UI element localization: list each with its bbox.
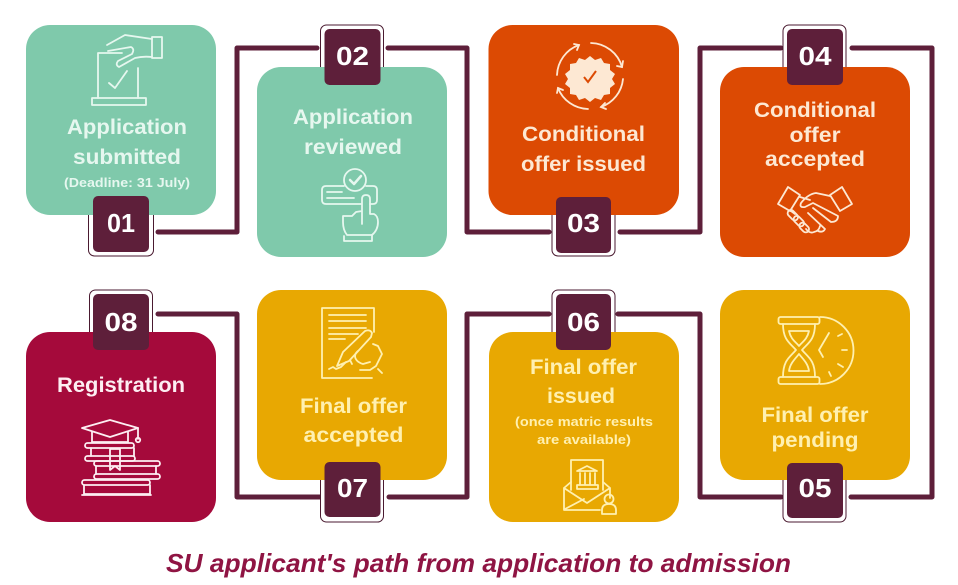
badge 02 bbox=[324, 29, 380, 85]
icon: ballot box with hand bbox=[92, 35, 162, 105]
icon: gear with check and cycle arrows bbox=[557, 43, 623, 109]
badge 08 bbox=[93, 294, 149, 350]
number 03: 03 bbox=[567, 208, 600, 238]
heading: Application bbox=[67, 116, 187, 139]
heading: Application bbox=[293, 106, 413, 129]
badge 01 bbox=[93, 196, 149, 252]
number 07: 07 bbox=[337, 473, 368, 503]
heading: Final offer bbox=[530, 356, 637, 379]
panel: step 08 registration bbox=[26, 332, 216, 522]
badge 05 bbox=[787, 463, 843, 518]
note: (once matric results bbox=[515, 415, 653, 429]
panel: step 06 final offer issued bbox=[489, 332, 679, 522]
icon: graduation cap on books bbox=[82, 420, 160, 495]
panel: step 03 conditional offer issued bbox=[488, 25, 679, 215]
heading: Conditional bbox=[754, 99, 876, 122]
note line 2: are available) bbox=[537, 433, 631, 447]
badge 07 bbox=[324, 462, 380, 517]
heading: Final offer bbox=[762, 404, 868, 427]
panel: step 01 application submitted bbox=[26, 25, 216, 215]
heading line 2: submitted bbox=[73, 146, 181, 169]
number 08: 08 bbox=[104, 307, 138, 337]
badge 03 bbox=[556, 197, 611, 253]
panel: step 05 final offer pending bbox=[720, 290, 910, 480]
icon: hand signing document bbox=[322, 308, 382, 378]
panel: step 02 application reviewed bbox=[257, 67, 447, 257]
icon: pointing hand with check bbox=[322, 169, 378, 241]
heading line 2: offer issued bbox=[521, 153, 646, 176]
number 01: 01 bbox=[107, 208, 135, 238]
heading line 2: accepted bbox=[304, 424, 404, 447]
note: (Deadline: 31 July) bbox=[64, 176, 190, 190]
heading line 2: issued bbox=[547, 385, 615, 408]
panel: step 07 final offer accepted bbox=[257, 290, 447, 480]
heading: Final offer bbox=[300, 395, 407, 418]
number 04: 04 bbox=[798, 41, 832, 71]
heading: Conditional bbox=[522, 123, 645, 146]
icon: envelope with bank and person bbox=[564, 460, 616, 514]
heading line 2: reviewed bbox=[304, 136, 402, 159]
title: SU applicant's path from application to admission bbox=[166, 548, 791, 578]
number 06: 06 bbox=[567, 307, 600, 337]
heading: Registration bbox=[57, 374, 185, 397]
number 05: 05 bbox=[798, 473, 832, 503]
connector path between steps bbox=[158, 48, 932, 497]
badge 06 bbox=[556, 294, 611, 350]
badge 04 bbox=[787, 29, 843, 85]
badge outlines bbox=[88, 25, 846, 522]
heading line 3: accepted bbox=[765, 148, 865, 171]
heading line 2: pending bbox=[772, 429, 858, 452]
heading line 2: offer bbox=[790, 124, 840, 147]
icon: handshake bbox=[778, 187, 852, 234]
number 02: 02 bbox=[336, 41, 369, 71]
panel: step 04 conditional offer accepted bbox=[720, 67, 910, 257]
icon: hourglass with clock bbox=[778, 317, 854, 384]
